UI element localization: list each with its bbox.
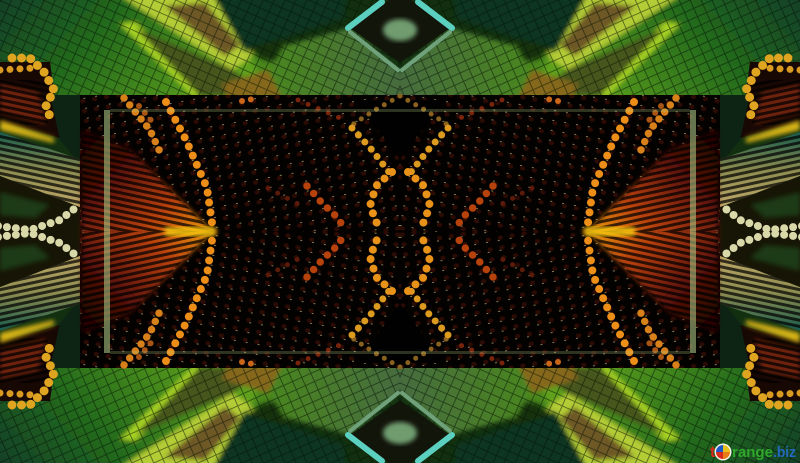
top-right quadrant: [383, 0, 800, 234]
bottom-right quadrant: [383, 229, 800, 463]
watermark logo: [710, 444, 796, 461]
bottom-left quadrant: [0, 229, 417, 463]
logo word range: range: [732, 444, 773, 461]
logo letter t: t: [710, 444, 716, 461]
top-left quadrant: [0, 0, 417, 234]
logo colour wheel: [714, 444, 732, 460]
pale green frame: [104, 109, 696, 354]
logo suffix biz: .biz: [773, 444, 796, 461]
